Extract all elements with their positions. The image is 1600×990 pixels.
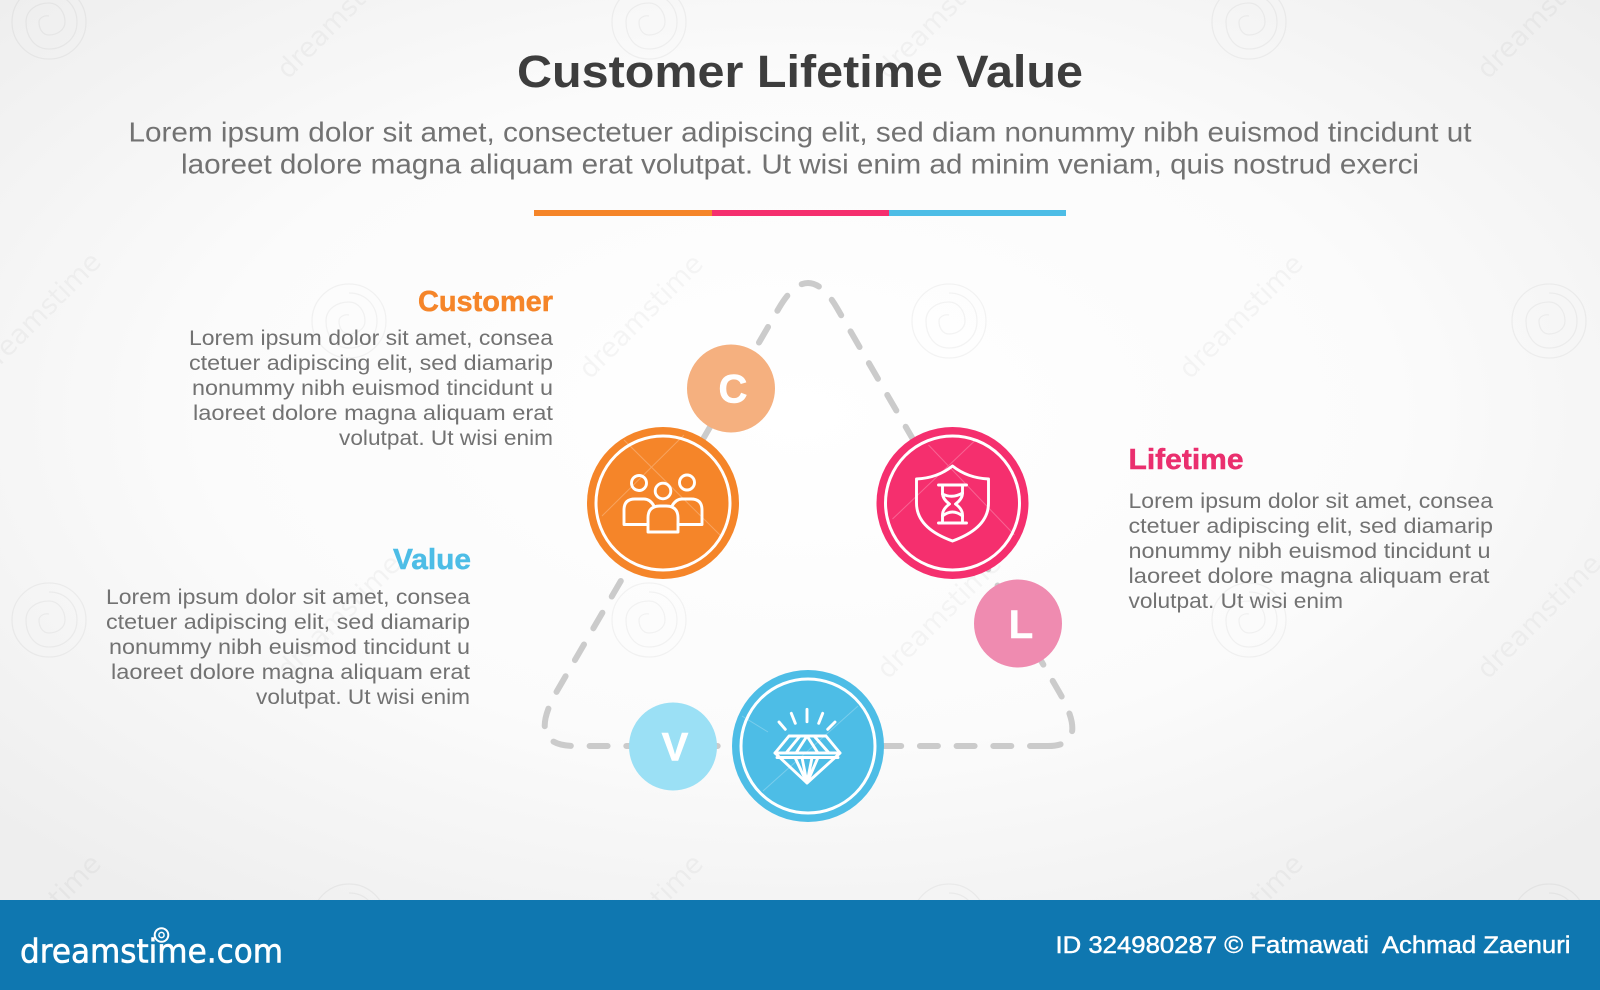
text block: lifetime: volutpat. Ut wisi enim <box>1128 589 1343 613</box>
divider bar <box>534 210 1066 216</box>
circle: customer people icon <box>587 427 739 579</box>
text block: customer <box>189 286 553 450</box>
text block: lifetime: nonummy nibh euismod tincidunt u <box>1128 539 1490 563</box>
footer logo: dreamstime.com <box>20 932 283 970</box>
subtitle: laoreet dolore magna aliquam erat volutpat. Ut wisi enim ad minim veniam, quis nostrud exerci <box>181 148 1419 180</box>
text block: customer: nonummy nibh euismod tincidunt u <box>192 376 553 400</box>
small circle: L <box>974 580 1062 668</box>
small circle: V <box>629 702 717 790</box>
watermark pattern: dreamstime <box>573 848 710 985</box>
footer bar <box>0 900 1600 990</box>
icon: shield with hourglass <box>916 466 988 541</box>
text block: value: volutpat. Ut wisi enim <box>256 685 470 709</box>
title: Customer Lifetime Value <box>517 46 1083 97</box>
text block: value <box>106 544 471 709</box>
subtitle: Lorem ipsum dolor sit amet, consectetuer adipiscing elit, sed diam nonummy nibh euismod tincidunt ut <box>128 116 1472 148</box>
circle: value diamond icon <box>732 670 884 822</box>
circle: lifetime shield icon <box>876 427 1028 579</box>
subtitle <box>128 116 1472 180</box>
text block: value: ctetuer adipiscing elit, sed diamarip <box>106 610 470 634</box>
small circle: V: V <box>662 726 689 770</box>
small circle: C: C <box>719 368 747 412</box>
text block: value: nonummy nibh euismod tincidunt u <box>109 635 470 659</box>
small circle: C <box>687 344 775 432</box>
text block: lifetime: Lifetime <box>1128 444 1244 476</box>
text block: customer: laoreet dolore magna aliquam erat <box>193 401 553 425</box>
text block: value: Value <box>393 544 471 576</box>
text block: lifetime <box>1128 444 1493 613</box>
text block: lifetime: laoreet dolore magna aliquam erat <box>1128 564 1490 588</box>
text block: customer: Customer <box>418 286 553 318</box>
watermark pattern: dreamstime <box>573 248 710 385</box>
small circle: L: L <box>1009 603 1033 647</box>
watermark pattern: dreamstime <box>1173 248 1310 385</box>
footer credit: ID 324980287 © Fatmawati Achmad Zaenuri <box>1056 932 1570 959</box>
text block: customer: volutpat. Ut wisi enim <box>339 426 553 450</box>
text block: customer: ctetuer adipiscing elit, sed diamarip <box>189 351 553 375</box>
text block: lifetime: ctetuer adipiscing elit, sed diamarip <box>1128 514 1493 538</box>
text block: value: laoreet dolore magna aliquam erat <box>111 660 470 684</box>
icon: people <box>624 475 702 532</box>
watermark pattern: dreamstime <box>271 548 408 685</box>
text block: lifetime: Lorem ipsum dolor sit amet, consea <box>1128 489 1493 513</box>
text block: customer: Lorem ipsum dolor sit amet, consea <box>189 326 553 350</box>
text block: value: Lorem ipsum dolor sit amet, consea <box>106 585 470 609</box>
watermark pattern: dreamstime <box>1173 848 1310 985</box>
dashed triangle <box>545 283 1072 746</box>
watermark pattern: dreamstime <box>871 548 1008 685</box>
icon: diamond <box>775 709 840 783</box>
